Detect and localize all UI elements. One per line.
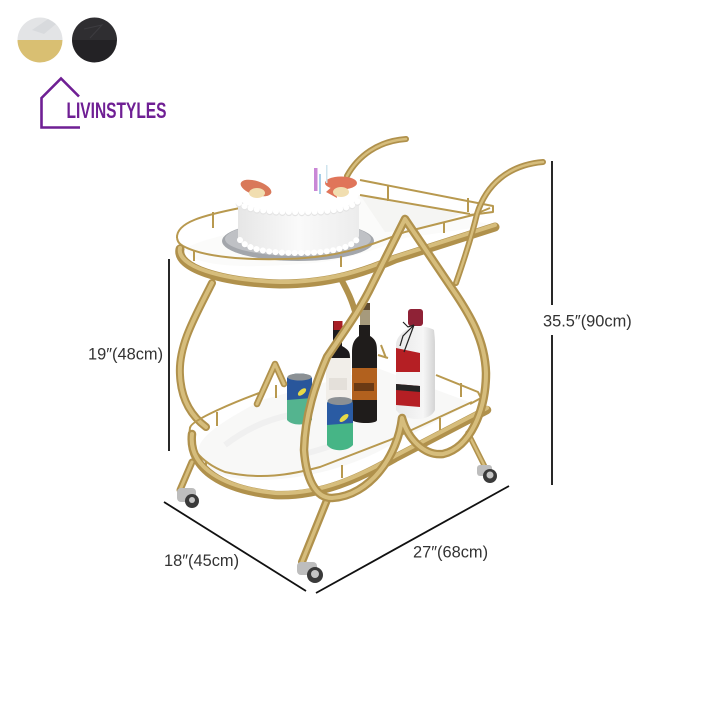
dimension: height 35.5 inches: 35.5″(90cm) (543, 312, 632, 330)
dimension: depth 18 inches: 18″(45cm) (164, 552, 239, 570)
legs (180, 433, 485, 562)
bottle: white with red label (396, 309, 435, 419)
can: rear (287, 374, 312, 424)
bar cart (177, 139, 543, 583)
dimension: height 19 inches: 19″(48cm) (88, 346, 163, 364)
dimension: width 27 inches: 27″(68cm) (413, 544, 488, 562)
small rear apex on lower shelf (257, 364, 284, 404)
bottle: dark wine with orange label (352, 303, 377, 423)
candles (314, 165, 328, 194)
top shelf frame tube (180, 225, 495, 284)
cake decoration: left rose (239, 176, 273, 200)
cake plate (222, 221, 374, 261)
color swatch: marble and gold (17, 17, 63, 63)
lower shelf frame tube (192, 408, 487, 495)
handle: rear (347, 139, 406, 176)
lower shelf front rail (190, 402, 472, 478)
handle: front (456, 162, 543, 283)
can: front (327, 397, 353, 450)
back frame: left loop (180, 277, 356, 427)
top shelf (177, 180, 493, 266)
cake decoration: right rose (325, 176, 357, 198)
casters (177, 465, 497, 583)
color swatch: black (71, 17, 118, 63)
logo: Livinstyles: LIVINSTYLES (66, 98, 166, 123)
bottle: red-capped wine (326, 321, 351, 400)
lower shelf (190, 345, 481, 480)
cake (238, 165, 359, 254)
logo: Livinstyles (42, 78, 166, 128)
dimension: width 27 inches (316, 486, 509, 593)
dimension: depth 18 inches (164, 502, 306, 591)
front heart frame (304, 219, 486, 498)
top shelf front rail (177, 208, 490, 267)
